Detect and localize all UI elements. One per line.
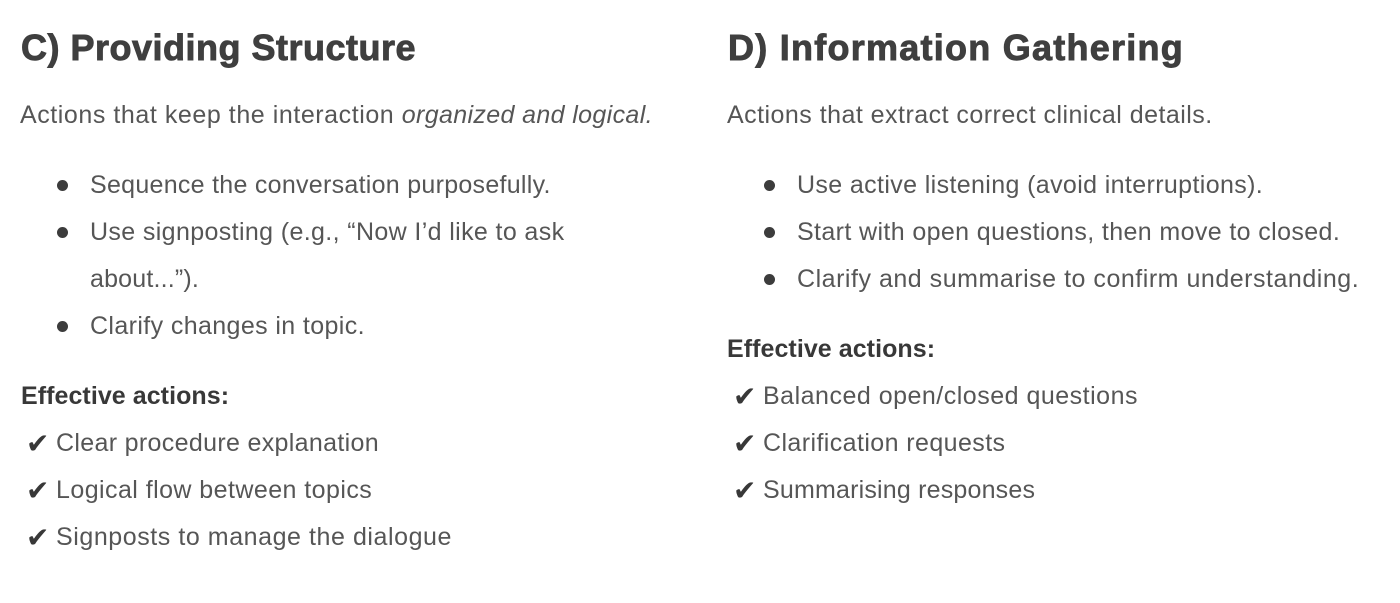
intro text: D: Actions that extract correct clinical details. [727,101,1213,129]
checklist: D: Clarification requests [763,429,1005,457]
bullet list: D [764,171,1359,293]
subheading: D effective actions: Effective actions: [727,335,935,363]
checklist: C: Logical flow between topics [56,476,372,504]
bullet list: D: Clarify and summarise to confirm understanding. [797,265,1359,293]
intro text: C: Actions that keep the interaction organized and logical. [20,101,653,129]
checklist: C: ✔ [26,427,49,460]
panel: C) Providing Structure [20,27,653,554]
checklist: D: Summarising responses [763,476,1035,504]
checklist: D: ✔ [733,427,756,460]
checklist: D: ✔ [733,380,756,413]
bullet list: C [57,171,564,340]
panel: D) Information Gathering [727,27,1359,507]
subheading: C effective actions: Effective actions: [21,382,229,410]
bullet list: C: about...”). [90,265,199,293]
bullet list: C: Use signposting (e.g., “Now I’d like to ask [90,218,564,246]
bullet list: D: Use active listening (avoid interruptions). [797,171,1263,199]
bullet list: C: Sequence the conversation purposefully. [90,171,551,199]
bullet list: C: Clarify changes in topic. [90,312,365,340]
heading: D: D) Information Gathering [728,27,1184,68]
checklist: D [733,380,1138,507]
checklist: C: ✔ [26,474,49,507]
checklist: C: Signposts to manage the dialogue [56,523,452,551]
checklist: D: ✔ [733,474,756,507]
heading: C: C) Providing Structure [21,27,416,68]
checklist: C: Clear procedure explanation [56,429,379,457]
bullet list: D: Start with open questions, then move to closed. [797,218,1340,246]
checklist: C: ✔ [26,521,49,554]
checklist: C [26,427,452,554]
checklist: D: Balanced open/closed questions [763,382,1138,410]
